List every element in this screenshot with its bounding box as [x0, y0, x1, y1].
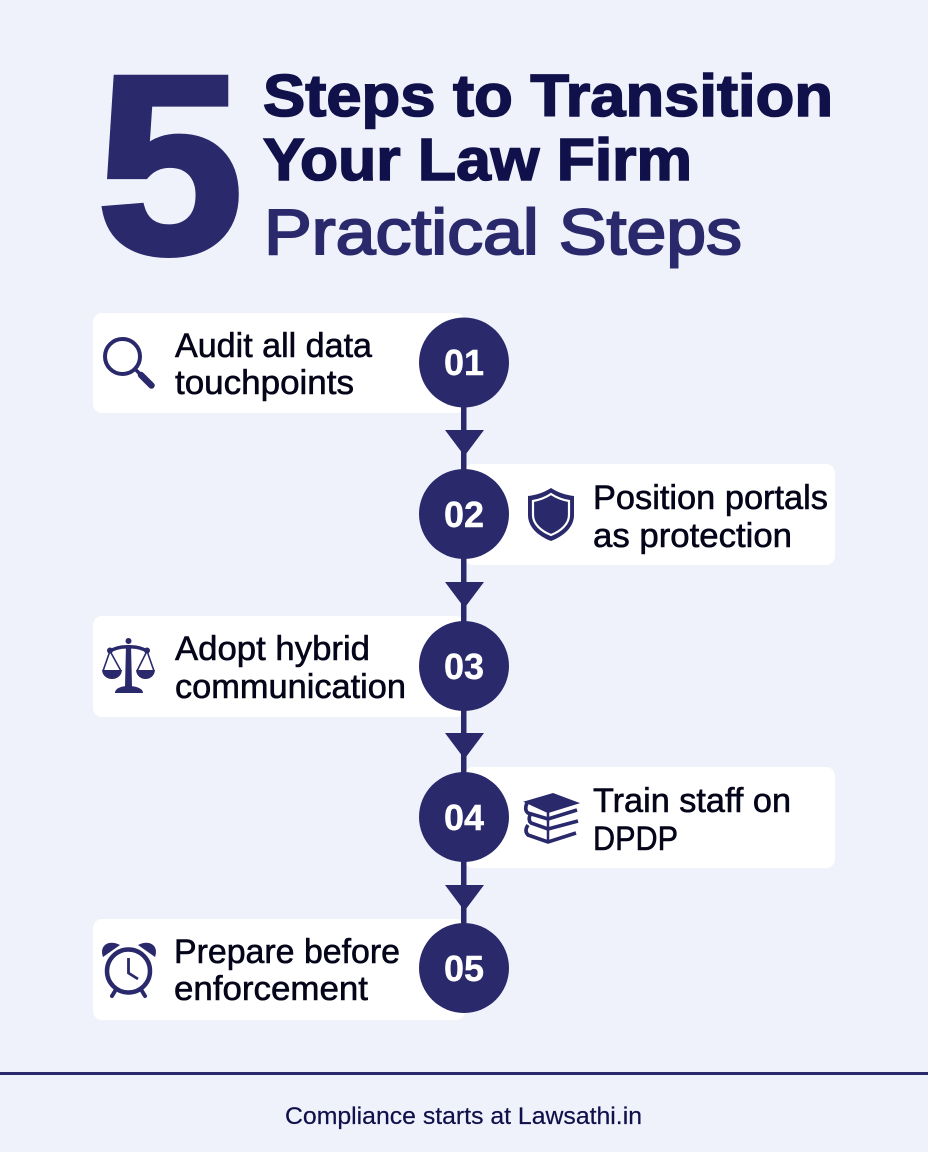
text: step 4 label: DPDP: [593, 820, 678, 858]
text: step 3 label: [175, 630, 406, 706]
text: step 4 label: [593, 782, 791, 858]
text: step 1 label: touchpoints: [175, 364, 354, 402]
text: step 3 label: communication: [175, 668, 406, 706]
title: heading: Steps to Transition: [263, 63, 833, 129]
step number 03: 03: [444, 646, 484, 687]
text: step 1 label: Audit all data: [175, 327, 372, 365]
panel: step 5 card: [93, 919, 465, 1020]
icon: shield: [528, 488, 574, 541]
step number 02: [419, 469, 509, 559]
panel: step 4 card: [464, 767, 835, 868]
subtitle: Practical Steps: [264, 196, 742, 268]
title: heading: [263, 63, 833, 193]
step number 05: 05: [444, 948, 484, 989]
title: big numeral 5: 5: [97, 22, 243, 306]
title: heading: Your Law Firm: [263, 127, 692, 193]
icon: magnifying glass: [105, 339, 152, 386]
text: step 4 label: Train staff on: [593, 782, 791, 820]
step number 03: [419, 621, 509, 711]
text: step 3 label: Adopt hybrid: [175, 630, 370, 668]
step number 01: [419, 318, 509, 408]
text: step 2 label: [593, 479, 828, 555]
step number 05: [419, 923, 509, 1013]
text: step 2 label: Position portals: [593, 479, 828, 517]
step number 02: 02: [444, 494, 484, 535]
panel: step 3 card: [93, 616, 465, 717]
footer divider: [0, 1072, 928, 1075]
step number 04: [419, 772, 509, 862]
text: step 5 label: enforcement: [174, 970, 369, 1008]
panel: step 1 card: [93, 313, 465, 413]
icon: alarm clock: [102, 943, 156, 996]
panel: step 2 card: [464, 464, 835, 565]
timeline connector with arrows: [445, 362, 484, 968]
icon: scales of justice: [102, 638, 155, 693]
text: step 5 label: [174, 933, 400, 1008]
step number 01: 01: [444, 342, 484, 383]
text: step 1 label: [175, 327, 372, 402]
icon: stack of books: [526, 794, 578, 842]
step number 04: 04: [444, 797, 484, 838]
footer text: Compliance starts at Lawsathi.in: [285, 1103, 642, 1130]
text: step 5 label: Prepare before: [174, 933, 400, 971]
text: step 2 label: as protection: [593, 517, 792, 555]
